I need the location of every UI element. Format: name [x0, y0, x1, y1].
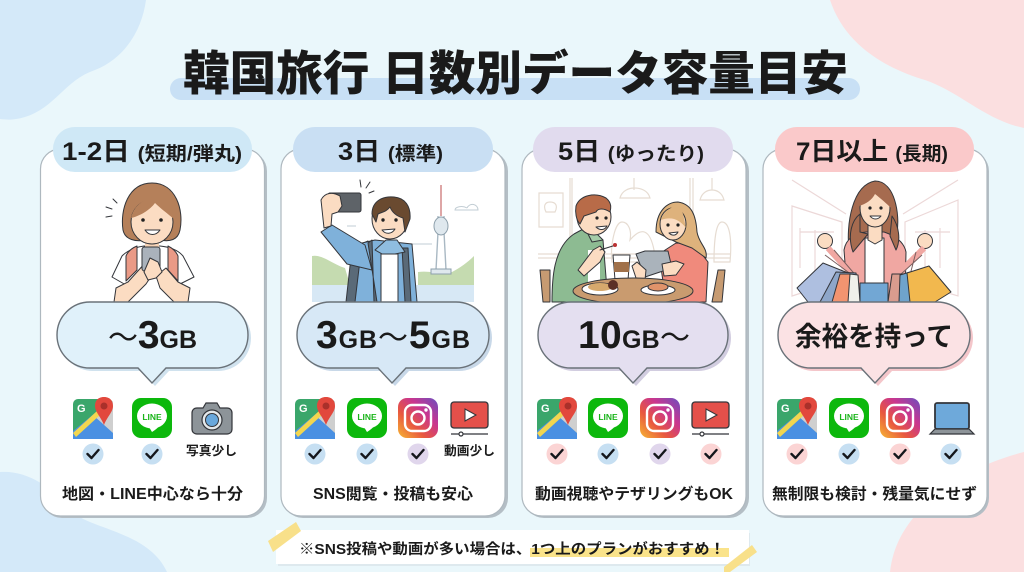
icon: LINE: LINE: [598, 412, 618, 422]
header pill: 3日: [293, 127, 493, 172]
data bubble: 3GB~5GB: 3GB～5GB: [316, 314, 470, 357]
icon: maps: [777, 397, 817, 439]
icon: LINE: [347, 398, 387, 438]
check marks: [546, 444, 722, 464]
data bubble: ~3GB: [57, 302, 251, 386]
data bubble: 余裕を持って: [778, 302, 973, 386]
icon: maps: [537, 397, 577, 439]
icon: laptop: [930, 403, 974, 434]
panel: 7日以上: [763, 127, 989, 518]
icon: LINE: [829, 398, 869, 438]
header pill: 1-2日: 1-2日 (短期/弾丸): [62, 138, 242, 166]
check marks: [786, 444, 962, 464]
title: 韓国旅行 日数別データ容量目安: [183, 47, 848, 100]
data bubble: 10GB~: [538, 302, 731, 386]
icon: LINE: LINE: [839, 412, 859, 422]
icon: maps: G: [299, 403, 308, 415]
check marks: [304, 444, 428, 464]
data bubble: ~3GB: ～3GB: [108, 314, 197, 357]
illustration: woman with phone: [106, 183, 194, 302]
header pill: 5日: 5日 (ゆったり): [558, 138, 704, 166]
panel: 3日: [281, 127, 508, 518]
check marks: [82, 444, 162, 464]
icon: Instagram: [398, 398, 438, 438]
footer note: ※SNS投稿や動画が多い場合は、1つ上のプランがおすすめ！: [299, 540, 725, 558]
header pill: 3日: 3日 (標準): [338, 138, 443, 166]
panel caption: 地図・LINE中心なら十分: [62, 485, 244, 503]
header pill: 1-2日: [53, 127, 252, 172]
data bubble: 3GB~5GB: [297, 302, 492, 386]
icon: LINE: [132, 398, 172, 438]
panel: 5日: [522, 127, 749, 518]
illustration: couple at cafe: [538, 178, 731, 304]
header pill: 7日以上: 7日以上 (長期): [796, 138, 948, 166]
panel caption: 動画視聴やテザリングもOK: [535, 484, 734, 503]
icon: LINE: LINE: [142, 412, 162, 422]
icon: maps: G: [781, 403, 790, 415]
data bubble: 10GB~: 10GB～: [578, 314, 690, 357]
header pill: 7日以上: [775, 127, 974, 172]
illustration: woman with shopping bags: [792, 180, 958, 302]
panel caption: 無制限も検討・残量気にせず: [772, 484, 977, 503]
label: 動画少し: 動画少し: [444, 443, 495, 458]
icon: Instagram: [640, 398, 680, 438]
icon: LINE: [588, 398, 628, 438]
icon: video: [692, 402, 729, 436]
panel caption: SNS閲覧・投稿も安心: [313, 484, 474, 503]
label: 写真少し: 写真少し: [186, 443, 237, 458]
footer note: [268, 522, 757, 572]
header pill: 5日: [533, 127, 733, 172]
icon: video: [451, 402, 488, 436]
icon: maps: G: [541, 403, 550, 415]
illustration: man taking selfie by tower: [312, 180, 478, 302]
icon: Instagram: [880, 398, 920, 438]
icon: maps: [295, 397, 335, 439]
icon: LINE: LINE: [357, 412, 377, 422]
icon: maps: G: [77, 403, 86, 415]
panel: 1-2日: [40, 127, 267, 518]
data bubble: 余裕を持って: 余裕を持って: [795, 322, 953, 352]
icon: maps: [73, 397, 113, 439]
icon: camera: [192, 403, 232, 434]
